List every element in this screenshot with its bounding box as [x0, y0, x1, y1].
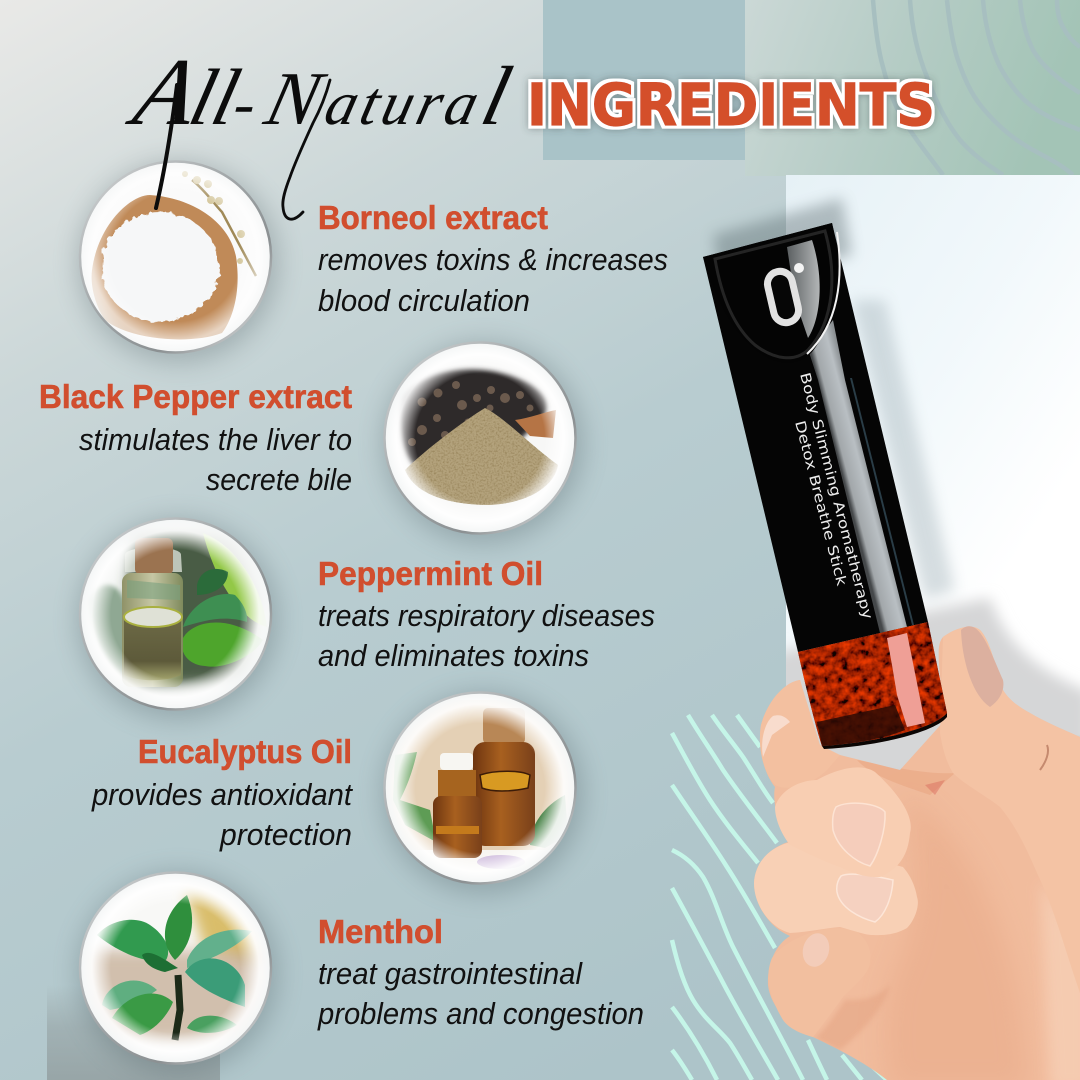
thumb — [940, 627, 1080, 993]
text: Black Pepper extract: stimulates the liver to — [79, 422, 352, 457]
red band — [798, 622, 947, 749]
title — [119, 39, 935, 219]
text: Menthol — [317, 913, 644, 1031]
little fingertip — [768, 928, 870, 1037]
icon: eucalyptus oil circle — [383, 692, 583, 893]
title: - — [227, 69, 264, 138]
text: Menthol: problems and congestion — [317, 996, 644, 1031]
mint wavy lines — [672, 715, 887, 1080]
text: Eucalyptus Oil: protection — [219, 817, 352, 852]
title: A — [119, 39, 210, 146]
icon: menthol circle — [78, 872, 278, 1073]
index fingertip — [760, 680, 840, 788]
text: Peppermint Oil: Peppermint Oil — [318, 555, 543, 592]
title: N — [257, 56, 334, 141]
text: Peppermint Oil: and eliminates toxins — [318, 638, 589, 673]
text: Borneol extract — [318, 199, 668, 318]
panel: white backdrop — [770, 175, 1080, 780]
hand — [754, 626, 1080, 1080]
icon: peppermint oil circle — [78, 518, 278, 719]
stick label: Body Slimming Aromatherapy — [796, 371, 875, 621]
title: ll — [182, 53, 248, 142]
middle fingertip — [775, 767, 911, 877]
product: black aromatherapy stick — [703, 223, 947, 749]
title: atura — [319, 69, 490, 138]
ring fingertip — [754, 843, 918, 935]
stick label — [791, 371, 875, 621]
text: Peppermint Oil: treats respiratory diseases — [318, 598, 655, 633]
text: Borneol extract: blood circulation — [318, 283, 530, 318]
icon: borneol salt circle — [78, 161, 278, 362]
title: l — [473, 50, 520, 143]
cap — [703, 223, 840, 363]
text: Eucalyptus Oil: Eucalyptus Oil — [138, 733, 352, 770]
panel: top right green block with contour lines — [745, 0, 1080, 176]
text: Eucalyptus Oil — [91, 733, 353, 852]
panel: darker teal top block — [543, 0, 745, 160]
icon: black pepper circle — [383, 342, 583, 543]
text: Borneol extract: removes toxins & increases — [318, 242, 668, 277]
text: Black Pepper extract — [39, 378, 352, 497]
panel: bottom grey block — [47, 985, 220, 1080]
text: Menthol: treat gastrointestinal — [318, 956, 583, 991]
logo — [765, 263, 804, 325]
stick shadow — [713, 198, 955, 600]
stick label: Detox Breathe Stick — [791, 419, 849, 589]
text: Eucalyptus Oil: provides antioxidant — [91, 777, 353, 812]
title: INGREDIENTS — [527, 71, 935, 139]
text: Menthol: Menthol — [318, 913, 443, 950]
text: Peppermint Oil — [318, 555, 655, 673]
stick blue line — [850, 378, 914, 625]
text: Black Pepper extract: Black Pepper extract — [39, 378, 352, 415]
text: Black Pepper extract: secrete bile — [206, 462, 352, 497]
text: Borneol extract: Borneol extract — [318, 199, 548, 236]
stick highlight — [809, 320, 907, 633]
